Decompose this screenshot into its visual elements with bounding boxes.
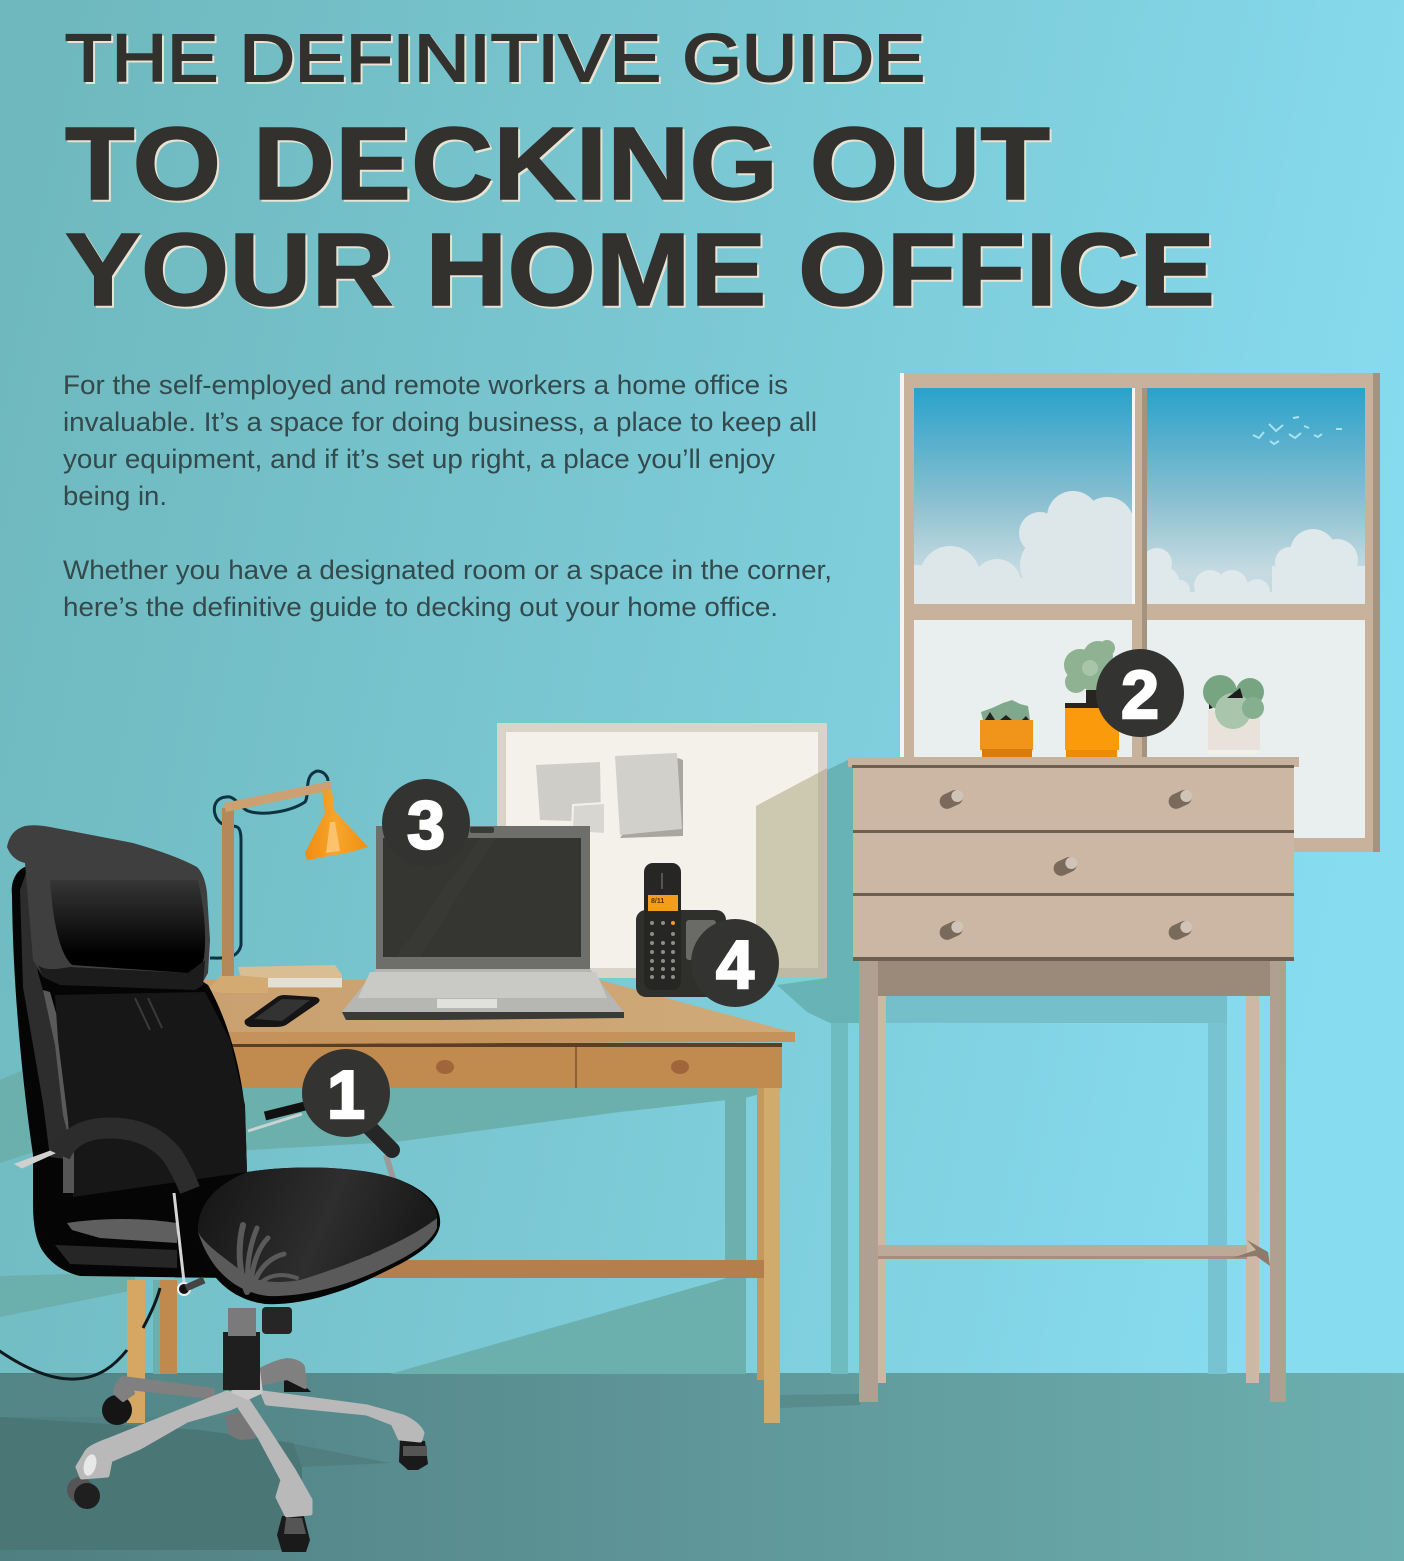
power cable [0, 1288, 160, 1379]
phone base [636, 910, 726, 997]
dresser top [848, 757, 1299, 767]
badge 2 [1096, 649, 1184, 737]
cordless phone: 8/11 [651, 898, 664, 905]
desk back-right leg [757, 1088, 765, 1380]
dresser body [853, 767, 1294, 960]
cordless phone [636, 863, 726, 997]
desk front-left leg [127, 1280, 145, 1423]
wall shadows [0, 760, 1227, 1374]
plant: left orange pot [980, 700, 1033, 757]
back side bolster [20, 870, 72, 1160]
floor [0, 1373, 1404, 1561]
window [898, 373, 1380, 852]
rear casters [102, 1380, 311, 1425]
badge 1: 1 [327, 1057, 365, 1133]
badge 2: 2 [1121, 657, 1159, 733]
smartphone [245, 995, 320, 1027]
desk back-left leg [160, 1280, 177, 1374]
intro text: here’s the definitive guide to decking out your home office. [63, 592, 778, 622]
dresser stretcher [878, 1240, 1270, 1266]
keypad [650, 921, 675, 979]
badge 4 [691, 919, 779, 1007]
seat [197, 1167, 440, 1304]
chair back [12, 866, 247, 1278]
intro text: Whether you have a designated room or a space in the corner, [63, 555, 832, 585]
plant: white pot [1203, 675, 1264, 754]
intro text: For the self-employed and remote workers a home office is [63, 370, 788, 400]
desk rail [175, 1260, 765, 1278]
pinned papers [536, 753, 683, 838]
base hub [230, 1370, 263, 1400]
dresser apron [878, 960, 1270, 996]
title line 2: TO DECKING OUT [65, 106, 1050, 221]
laptop lid [376, 826, 590, 969]
plant: tall orange pot [1064, 640, 1119, 757]
floor shadows [0, 1374, 860, 1550]
lamp [208, 771, 368, 993]
lower back trim [55, 1143, 177, 1268]
lamp arm [224, 781, 332, 812]
lamp cable [210, 771, 328, 958]
lamp books [238, 965, 342, 988]
left clouds [914, 491, 1132, 604]
back crease [135, 998, 162, 1030]
left armrest [15, 1128, 204, 1295]
gas cylinder [223, 1307, 292, 1390]
badge 4: 4 [716, 927, 754, 1003]
right armrest [248, 1106, 394, 1182]
intro text: your equipment, and if it’s set up right, a place you’ll enjoy [63, 444, 776, 474]
headrest [7, 825, 210, 987]
lamp shade [305, 790, 368, 860]
lower panes [914, 620, 1365, 838]
title line 1: THE DEFINITIVE GUIDE [65, 21, 925, 96]
laptop base [342, 969, 624, 1012]
rear base arms [115, 1360, 305, 1438]
lamp pole [222, 808, 234, 976]
dresser back legs [878, 990, 1259, 1383]
back panel [55, 992, 247, 1197]
laptop trackpad [437, 999, 497, 1008]
desk drawers [225, 1047, 782, 1088]
title line 3: YOUR HOME OFFICE [65, 212, 1215, 327]
seat wrinkles [240, 1225, 297, 1292]
laptop [342, 826, 624, 1020]
seat cushion [198, 1167, 437, 1282]
dresser front legs [859, 960, 1286, 1402]
webcam [470, 827, 494, 833]
office chair [7, 825, 440, 1552]
sky panes [914, 388, 1365, 604]
desk front-right leg [764, 1088, 780, 1423]
dresser [848, 757, 1299, 1402]
dresser knobs [937, 787, 1195, 942]
desk top [200, 980, 795, 1044]
laptop screen [383, 838, 581, 957]
birds [1253, 417, 1342, 444]
title [65, 21, 1215, 327]
intro text [63, 370, 832, 622]
badge 3 [382, 779, 470, 867]
front casters [67, 1438, 428, 1552]
handset display [648, 895, 678, 911]
desk [127, 980, 795, 1423]
intro text: being in. [63, 481, 167, 511]
intro text: invaluable. It’s a space for doing business, a place to keep all [63, 407, 817, 437]
badge 3: 3 [407, 787, 445, 863]
right clouds [1140, 529, 1365, 605]
lamp base [208, 974, 268, 993]
laptop keyboard [358, 972, 607, 998]
pinboard [497, 723, 827, 978]
badge 1 [302, 1049, 390, 1137]
seat edge highlight [198, 1215, 437, 1296]
base arms [78, 1393, 422, 1515]
handset [644, 863, 681, 990]
